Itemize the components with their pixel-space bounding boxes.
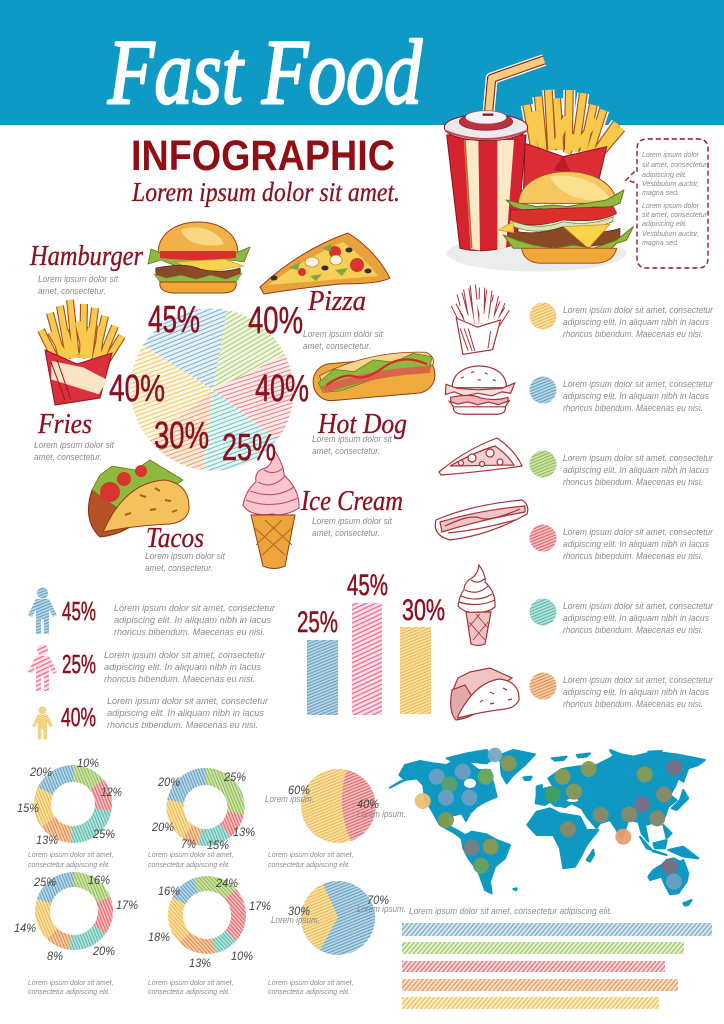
pie percentages: 40%: [248, 300, 303, 342]
donut chart 4: 10%: [231, 949, 253, 963]
pie chart 30/70: [268, 881, 406, 996]
legend item: blue: adipiscing elit. In aliquam nibh in lacus: [563, 391, 709, 401]
label: Ice Cream: [300, 485, 403, 538]
pie chart 60/40: Lorem ipsum.: [265, 794, 314, 804]
legend item: green: rhoncus bibendum. Maecenas eu nisi.: [563, 477, 703, 487]
donut chart 3: 17%: [116, 898, 138, 912]
donut chart 4: Lorem ipsum dolor sit amet,: [148, 980, 234, 987]
donut chart 4: 13%: [189, 956, 211, 970]
world map with markers: [390, 748, 705, 906]
label: Fries: Fries: [37, 408, 92, 440]
donut chart 2: 13%: [233, 825, 255, 839]
sketch icon: pizza: [439, 438, 522, 475]
pie chart 30/70: Lorem ipsum.: [271, 915, 320, 925]
person: blue 45%: Lorem ipsum dolor sit amet, consectetur: [114, 603, 276, 613]
donut chart 1: [17, 756, 122, 869]
person: pink 25%: Lorem ipsum dolor sit amet, consectetur: [104, 650, 266, 660]
sketch icon: hot dog: [435, 500, 528, 540]
legend item: green: Lorem ipsum dolor sit amet, consectetur: [563, 453, 714, 463]
callout: dashed speech bubble: sit amet, consectetur: [642, 162, 708, 169]
donut chart 1: 12%: [101, 785, 122, 799]
donut chart 2: [148, 770, 255, 869]
legend item: blue: Lorem ipsum dolor sit amet, consectetur: [563, 379, 714, 389]
legend item: red: [530, 524, 714, 561]
donut chart 1: 25%: [92, 827, 115, 841]
donut chart 1: 13%: [36, 833, 58, 847]
pie percentages: 25%: [222, 427, 276, 469]
pie percentages: 30%: [154, 415, 209, 457]
label: Hamburger: amet, consectetur.: [38, 286, 106, 296]
label: Pizza: Pizza: [307, 285, 366, 317]
pie chart 30/70: 70%: [367, 893, 389, 907]
label: Ice Cream: Lorem ipsum dolor sit: [312, 516, 392, 526]
legend item: green: adipiscing elit. In aliquam nibh in lacus: [563, 465, 709, 475]
donut chart 1: Lorem ipsum dolor sit amet,: [28, 852, 114, 859]
bar chart: [297, 569, 445, 715]
legend item: yellow: adipiscing elit. In aliquam nibh in lacus: [563, 317, 709, 327]
person: pink 25%: 25%: [62, 649, 96, 679]
heading: INFOGRAPHIC: INFOGRAPHIC: [131, 132, 395, 180]
legend item: green: [530, 450, 714, 487]
pie chart 30/70: Lorem ipsum dolor sit amet,: [268, 980, 354, 987]
person: blue 45%: 45%: [62, 596, 96, 626]
sketch icon: taco: [451, 668, 519, 720]
person: yellow 40%: 40%: [61, 702, 96, 732]
donut chart 3: consectetur adipiscing elit.: [28, 989, 110, 996]
legend item: teal: rhoncus bibendum. Maecenas eu nisi.: [563, 625, 703, 635]
icon: hero burger: [498, 172, 633, 263]
donut chart 3: 16%: [88, 873, 110, 887]
person: pink 25%: rhoncus bibendum. Maecenas eu nisi.: [104, 674, 255, 684]
donut chart 4: [148, 875, 271, 996]
legend item: teal: [530, 598, 714, 635]
legend item: orange: [530, 672, 714, 709]
donut chart 1: consectetur adipiscing elit.: [28, 862, 110, 869]
bar chart: 25%: [297, 606, 338, 639]
donut chart 4: 16%: [158, 884, 180, 898]
donut chart 2: 20%: [157, 775, 180, 789]
main scribble pie chart: [130, 308, 293, 471]
pie percentages: [109, 299, 309, 469]
legend item: yellow: [530, 302, 714, 339]
legend item: orange: Lorem ipsum dolor sit amet, consectetur: [563, 675, 714, 685]
person: yellow 40%: adipiscing elit. In aliquam nibh in lacus: [107, 708, 265, 718]
callout: dashed speech bubble: adipiscing elit.: [642, 172, 687, 179]
donut chart 2: 7%: [181, 837, 196, 851]
pie chart 60/40: 60%: [288, 783, 310, 797]
map caption: Lorem ipsum dolor sit amet, consectetur adipiscing elit.: [409, 906, 612, 916]
legend item: teal: Lorem ipsum dolor sit amet, consectetur: [563, 601, 714, 611]
icon: fries: [41, 300, 122, 405]
pie chart 60/40: Lorem ipsum.: [357, 809, 406, 819]
person: blue 45%: adipiscing elit. In aliquam nibh in lacus: [114, 615, 272, 625]
bar chart: 45%: [347, 569, 388, 602]
donut chart 3: Lorem ipsum dolor sit amet,: [28, 980, 114, 987]
legend item: teal: adipiscing elit. In aliquam nibh in lacus: [563, 613, 709, 623]
person: pink 25%: adipiscing elit. In aliquam nibh in lacus: [104, 662, 262, 672]
label: Pizza: amet, consectetur.: [303, 341, 371, 351]
sketch icon: ice cream: [458, 565, 495, 646]
callout: dashed speech bubble: Lorem ipsum dolor: [642, 203, 700, 210]
donut chart 4: consectetur adipiscing elit.: [148, 989, 230, 996]
label: Tacos: [145, 522, 225, 573]
header band: [0, 0, 724, 125]
pie chart 30/70: consectetur adipiscing elit.: [268, 989, 350, 996]
person: yellow 40%: [32, 696, 269, 739]
sketch icon: fries: [454, 285, 507, 354]
donut chart 4: 18%: [148, 930, 170, 944]
legend dots and text: [530, 302, 714, 709]
callout: dashed speech bubble: Vestibulum auctor,: [642, 181, 699, 188]
legend item: blue: [530, 376, 714, 413]
person: pink 25%: [28, 644, 266, 691]
label: Tacos: amet, consectetur.: [145, 563, 213, 573]
callout: dashed speech bubble: sit amet, consectetur: [642, 212, 708, 219]
sketch icon: burger: [445, 366, 515, 414]
person: blue 45%: rhoncus bibendum. Maecenas eu nisi.: [114, 627, 265, 637]
subtitle: Lorem ipsum dolor sit amet.: [131, 177, 400, 207]
legend item: red: rhoncus bibendum. Maecenas eu nisi.: [563, 551, 703, 561]
legend item: red: Lorem ipsum dolor sit amet, consectetur: [563, 527, 714, 537]
label: Hot Dog: [312, 408, 407, 456]
label: Fries: amet, consectetur.: [34, 452, 102, 462]
donut chart 3: 25%: [33, 875, 56, 889]
donut chart 3: [14, 873, 138, 996]
callout: dashed speech bubble: magna sed.: [642, 240, 679, 247]
callout: dashed speech bubble: magna sed.: [642, 190, 679, 197]
callout: dashed speech bubble: Lorem ipsum dolor: [642, 152, 700, 159]
donut chart 2: 25%: [223, 770, 246, 784]
legend item: orange: adipiscing elit. In aliquam nibh in lacus: [563, 687, 709, 697]
icon: ice cream cone: [243, 450, 299, 568]
horizontal scribble bars: [402, 923, 712, 1009]
pie percentages: 40%: [255, 368, 309, 410]
bar chart: 30%: [402, 594, 445, 627]
legend item: yellow: rhoncus bibendum. Maecenas eu nisi.: [563, 329, 703, 339]
label: Fries: Lorem ipsum dolor sit: [34, 440, 114, 450]
donut chart 4: 24%: [215, 876, 238, 890]
donut chart 2: Lorem ipsum dolor sit amet,: [148, 852, 234, 859]
title: Fast Food: Fast Food: [107, 21, 423, 123]
label: Hot Dog: Lorem ipsum dolor sit: [312, 434, 392, 444]
legend item: red: adipiscing elit. In aliquam nibh in lacus: [563, 539, 709, 549]
donut chart 3: 14%: [14, 921, 36, 935]
pie percentages: 40%: [109, 368, 165, 410]
hero illustration: drink, fries and burger: [444, 60, 633, 272]
icon: pizza slice: [260, 233, 390, 294]
donut chart 2: 20%: [151, 820, 174, 834]
donut chart 4: 17%: [249, 899, 271, 913]
donut chart 1: 15%: [17, 801, 39, 815]
label: Tacos: Lorem ipsum dolor sit: [145, 551, 225, 561]
donut chart 3: 8%: [47, 949, 63, 963]
icon: hamburger: [148, 222, 250, 293]
label: Pizza: [303, 285, 383, 351]
callout: dashed speech bubble: [626, 139, 708, 268]
donut chart 1: 20%: [29, 765, 52, 779]
person: yellow 40%: Lorem ipsum dolor sit amet, consectetur: [107, 696, 269, 706]
label: Hamburger: [29, 240, 144, 296]
icon: hot dog: [311, 350, 436, 402]
pie percentages: 45%: [148, 299, 200, 341]
pie chart 60/40: consectetur adipiscing elit.: [268, 862, 350, 869]
label: Fries: [34, 408, 114, 462]
label: Hamburger: Hamburger: [29, 240, 144, 272]
pie chart 60/40: [265, 769, 406, 869]
callout: dashed speech bubble: adipiscing elit.: [642, 221, 687, 228]
label: Pizza: Lorem ipsum dolor sit: [303, 329, 383, 339]
donut chart 2: 15%: [207, 838, 229, 852]
person: yellow 40%: rhoncus bibendum. Maecenas eu nisi.: [107, 720, 258, 730]
legend item: blue: rhoncus bibendum. Maecenas eu nisi.: [563, 403, 703, 413]
label: Hamburger: Lorem ipsum dolor sit: [38, 274, 118, 284]
market markers: [415, 748, 682, 890]
donut chart 1: 10%: [77, 756, 99, 770]
people statistics: [28, 588, 276, 739]
label: Ice Cream: Ice Cream: [300, 485, 403, 517]
label: Hot Dog: Hot Dog: [317, 408, 407, 440]
pie chart 30/70: Lorem ipsum.: [357, 904, 406, 914]
pie chart 60/40: 40%: [357, 797, 379, 811]
map land: [390, 750, 705, 906]
callout: dashed speech bubble: Vestibulum auctor,: [642, 231, 699, 238]
legend item: yellow: Lorem ipsum dolor sit amet, consectetur: [563, 305, 714, 315]
pie chart 60/40: Lorem ipsum dolor sit amet,: [268, 852, 354, 859]
icon: soda cup: [444, 60, 544, 251]
donut chart 3: 20%: [92, 944, 115, 958]
label: Tacos: Tacos: [146, 522, 204, 554]
icon: taco: [88, 460, 189, 537]
pie chart 30/70: 30%: [288, 904, 310, 918]
shadow: [447, 235, 627, 272]
label: Ice Cream: amet, consectetur.: [312, 528, 380, 538]
label: Hot Dog: amet, consectetur.: [312, 446, 380, 456]
person: blue 45%: [28, 588, 276, 637]
legend item: orange: rhoncus bibendum. Maecenas eu nisi.: [563, 699, 703, 709]
map holes: [464, 779, 578, 812]
donut chart 2: consectetur adipiscing elit.: [148, 862, 230, 869]
icon: hero fries: [523, 90, 622, 197]
